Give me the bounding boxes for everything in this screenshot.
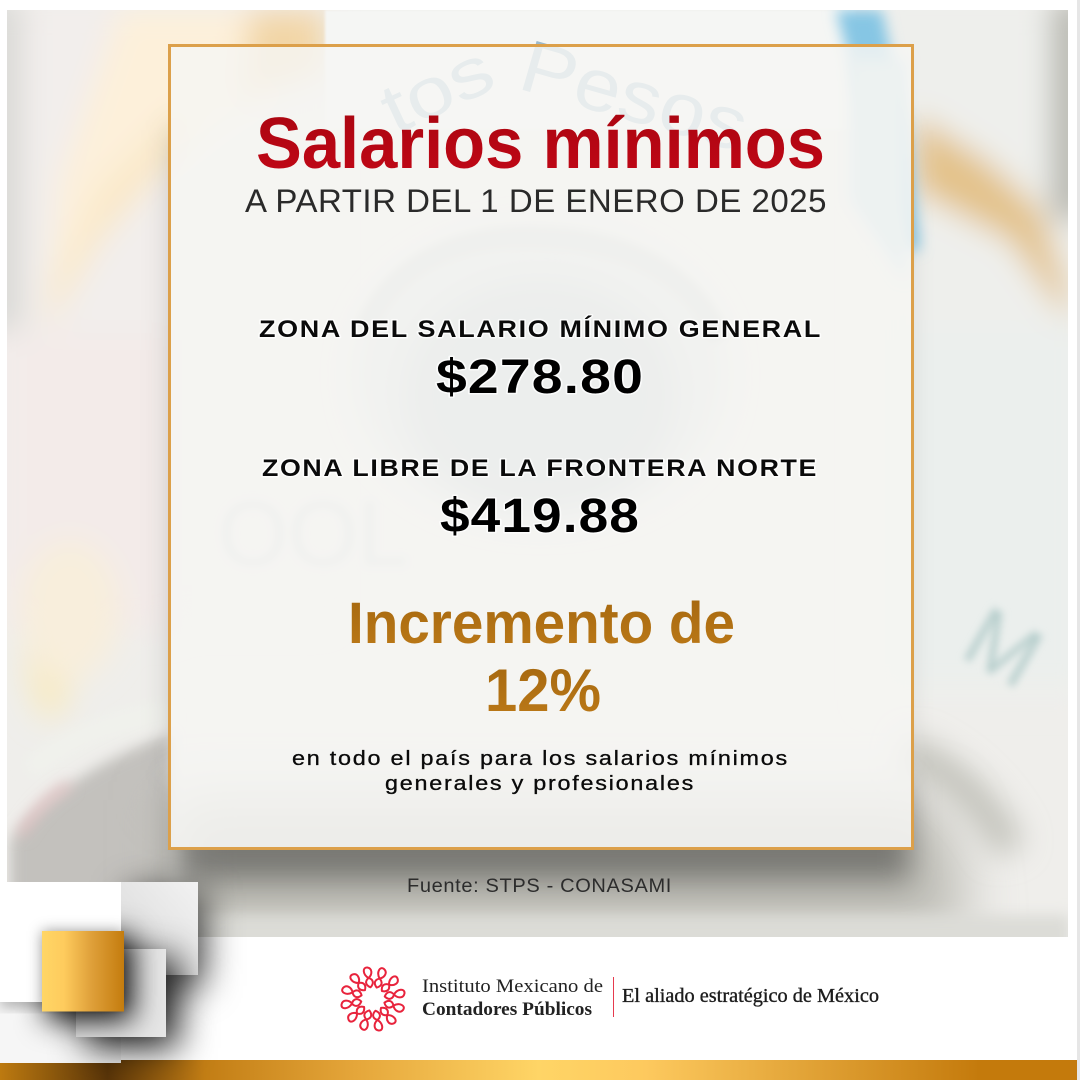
subtitle: A PARTIR DEL 1 DE ENERO DE 2025 xyxy=(245,183,827,219)
increase percentage: 12% xyxy=(485,657,601,724)
amount: north border: $419.88 xyxy=(440,490,640,543)
white footer band xyxy=(0,937,1077,1060)
slogan: El aliado estratégico de México xyxy=(622,986,879,1007)
bill printed text: OOL xyxy=(218,483,408,585)
description: generales y profesionales xyxy=(385,773,695,795)
soft shadow on the white square xyxy=(42,931,124,1011)
bill printed text: M xyxy=(948,589,1057,707)
right edge strip xyxy=(1077,0,1080,1080)
source note: Fuente: STPS - CONASAMI xyxy=(407,876,672,897)
title: Salarios mínimos xyxy=(256,104,825,184)
panel shadow xyxy=(172,130,910,880)
gold square xyxy=(42,931,124,1012)
strong shadow outside the white square xyxy=(0,936,132,1020)
zone label: general: ZONA DEL SALARIO MÍNIMO GENERAL xyxy=(259,315,822,343)
logo: Instituto Mexicano de Contadores Públicos xyxy=(339,965,879,1033)
gold footer bar xyxy=(0,1060,1077,1080)
description xyxy=(292,748,789,795)
decorative squares with gold accent xyxy=(0,882,204,1063)
bottom roll of bills xyxy=(7,730,1068,937)
zone label: north border: ZONA LIBRE DE LA FRONTERA NORTE xyxy=(262,455,818,482)
increase heading: Incremento de xyxy=(348,591,735,656)
panel: translucent card xyxy=(170,46,912,848)
description: en todo el país para los salarios mínimos xyxy=(292,748,789,770)
icon: ribbon rosette xyxy=(339,965,407,1033)
central roll of bills xyxy=(432,307,648,483)
organisation name: Contadores Públicos xyxy=(422,999,592,1020)
organisation name: Instituto Mexicano de xyxy=(422,976,603,997)
bill printed text: Pesos xyxy=(512,24,757,167)
amount: general: $278.80 xyxy=(436,351,644,404)
organisation name xyxy=(422,976,603,1020)
bill printed text: tos xyxy=(368,29,506,149)
bill printed text xyxy=(218,24,1057,707)
